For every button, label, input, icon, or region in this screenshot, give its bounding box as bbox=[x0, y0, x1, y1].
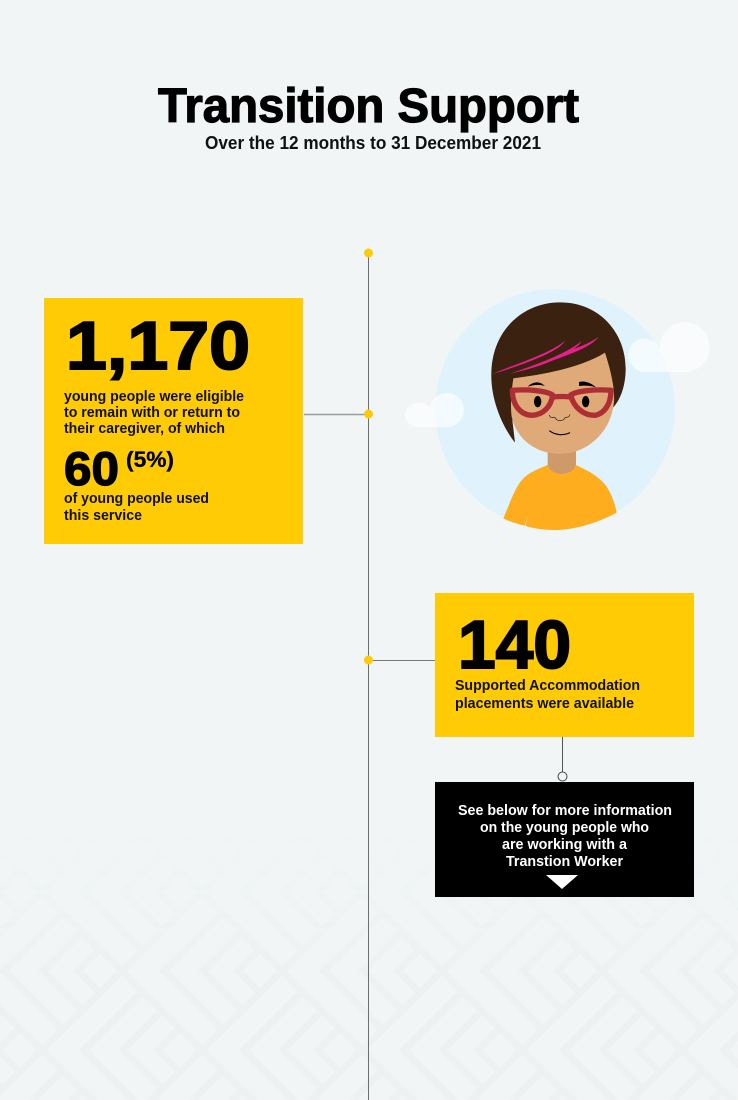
percentage: 5%: (5%) bbox=[126, 447, 174, 472]
big number: 140: 140 bbox=[458, 607, 571, 683]
icon: clouds bbox=[405, 322, 710, 427]
big number: 60: 60 bbox=[64, 442, 119, 495]
callout text: on the young people who bbox=[480, 819, 649, 836]
callout text: Transtion Worker bbox=[506, 853, 623, 870]
face and body bbox=[491, 302, 626, 530]
callout text bbox=[458, 802, 672, 870]
title: Transition Support bbox=[158, 80, 579, 133]
callout: see below bbox=[435, 782, 694, 897]
description: eligible: to remain with or return to bbox=[64, 404, 240, 421]
callout text: See below for more information bbox=[458, 802, 672, 819]
illustration: young person in circle bbox=[405, 289, 710, 530]
description: used service: this service bbox=[64, 507, 142, 524]
description: eligible: their caregiver, of which bbox=[64, 420, 225, 437]
description: placements: Supported Accommodation bbox=[455, 677, 640, 694]
subtitle: Over the 12 months to 31 December 2021 bbox=[205, 133, 541, 153]
timeline bbox=[304, 248, 435, 1100]
description: placements bbox=[455, 677, 640, 712]
icon: down arrow bbox=[546, 875, 578, 889]
description: used service bbox=[64, 490, 209, 524]
panel: supported accommodation bbox=[435, 593, 694, 737]
callout text: are working with a bbox=[502, 836, 628, 853]
description: eligible bbox=[64, 388, 244, 437]
description: used service: of young people used bbox=[64, 490, 209, 507]
connector bbox=[558, 737, 567, 781]
description: placements: placements were available bbox=[455, 695, 634, 712]
panel: eligible young people bbox=[44, 298, 303, 544]
description: eligible: young people were eligible bbox=[64, 388, 244, 405]
big number: 1,170: 1,170 bbox=[66, 308, 250, 384]
